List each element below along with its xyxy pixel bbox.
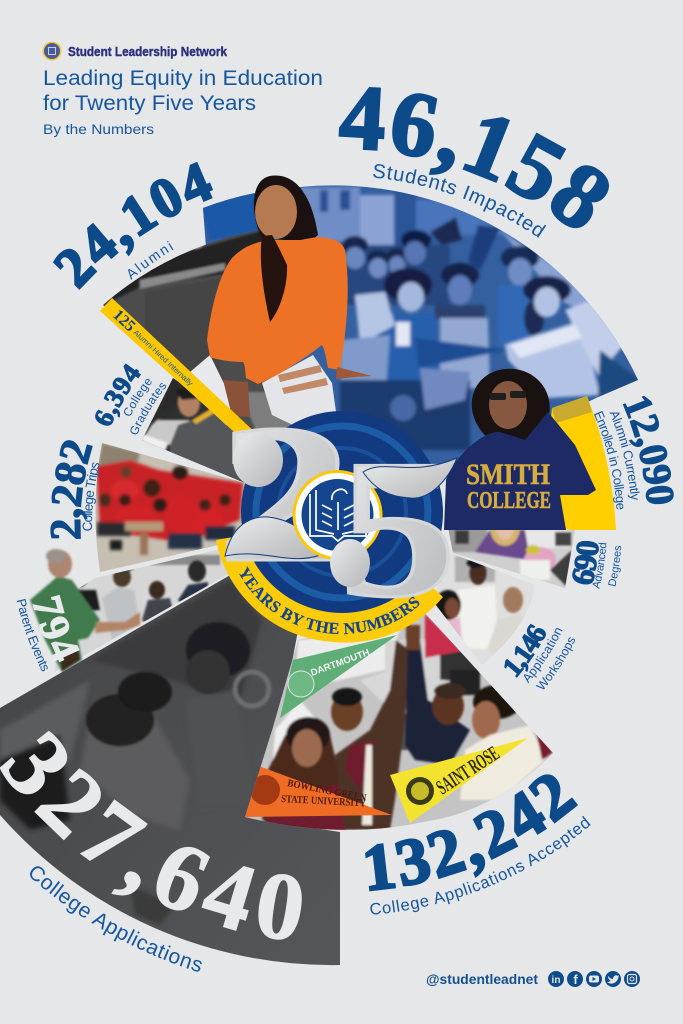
band: 125 alumni hired internally: [100, 298, 260, 440]
center book seal: [292, 470, 382, 560]
stat: 1,146 application workshops: Workshops: [536, 637, 575, 690]
header: [42, 42, 323, 137]
stat: 1,146 application workshops: [504, 624, 575, 690]
numeral 2: 2: [217, 384, 353, 603]
blue seal: [241, 411, 443, 613]
panel: application workshops photo: [436, 554, 535, 664]
icon: facebook: [567, 971, 583, 987]
footer: social handle and icons: @studentleadnet: [426, 971, 538, 987]
panel: college graduates photo: [142, 378, 245, 483]
panel: alumni field photo: [103, 230, 288, 429]
badge: 25 years by the numbers: [216, 384, 458, 643]
stat: 132,242 college applications accepted: College Applications Accepted: [370, 816, 591, 914]
panel: alumni enrolled in college yellow band: [540, 396, 616, 530]
crowd: [340, 245, 450, 305]
photo: woman in Smith College hoodie: COLLEGE: [467, 488, 551, 514]
stat: 6,394 college graduates: 6,394: [95, 363, 141, 426]
stat: 24,104 alumni: Alumni: [128, 240, 174, 280]
pennant: Dartmouth: [280, 635, 397, 718]
numeral 5: 5: [338, 419, 457, 638]
stat: 6,394 college graduates: Graduates: [130, 383, 166, 434]
logo: Student Leadership Network: [42, 42, 228, 60]
stat: 690 advanced degrees: Advanced: [592, 542, 606, 589]
photo: woman in Smith College hoodie: [444, 369, 596, 530]
stat: 46,158 students impacted: 46,158: [338, 87, 609, 228]
stat: 6,394 college graduates: College: [124, 378, 152, 416]
pennant: Dartmouth: DARTMOUTH: [309, 647, 371, 679]
pennant: Saint Rose: SAINT ROSE: [432, 741, 503, 799]
stat: 794 parent events: 794: [32, 594, 80, 662]
stat: 12,090 alumni currently enrolled: [594, 396, 674, 510]
stat: 1,146 application workshops: Application: [524, 628, 562, 684]
stat: 2,282 college trips: 2,282: [50, 440, 93, 539]
ribbon text: YEARS BY THE NUMBERS: [239, 566, 420, 634]
icon: twitter: [605, 971, 621, 987]
pennant: Bowling Green: BOWLING GREEN: [286, 778, 367, 804]
stat: 12,090 alumni currently enrolled: Enrolled in College: [594, 410, 624, 510]
icon: linkedin: [548, 971, 564, 987]
band: 125 alumni hired internally: 125: [109, 306, 138, 335]
red college flag: [425, 614, 462, 658]
pennant: Bowling Green: STATE UNIVERSITY: [281, 794, 367, 809]
logo: Student Leadership Network: Student Leadership Network: [68, 44, 228, 59]
stat: 327,640 college applications: College Applications: [30, 866, 202, 972]
stat: 690 advanced degrees: Degrees: [608, 546, 622, 586]
panel: parent events photo: [28, 548, 228, 673]
title: for Twenty Five Years: [43, 91, 256, 115]
ribbon: [216, 535, 443, 643]
title: [43, 66, 323, 115]
photo: woman in orange sweatshirt: [190, 176, 372, 436]
subtitle: By the Numbers: [43, 122, 154, 137]
stat: 690 advanced degrees: [572, 540, 622, 589]
stat: 690 advanced degrees: 690: [572, 540, 599, 584]
icon: instagram: [624, 971, 640, 987]
icon: facebook: f: [573, 972, 578, 987]
panel: college applications accepted photo: [245, 614, 553, 830]
pennant: Saint Rose: [390, 738, 528, 823]
panel: advanced degrees photo: [448, 529, 575, 588]
stat: 794 parent events: Parent Events: [16, 598, 48, 672]
photo: woman in Smith College hoodie: SMITH: [466, 458, 550, 491]
footer: social handle and icons: [426, 971, 640, 987]
icon: linkedin: in: [552, 975, 560, 986]
panel: college trips photo: [96, 443, 245, 572]
stat: 12,090 alumni currently enrolled: Alumni Currently: [610, 412, 640, 500]
icon: youtube: [586, 971, 602, 987]
band: 125 alumni hired internally: Alumni Hired Internally: [132, 328, 195, 388]
stat: 6,394 college graduates: [95, 363, 166, 434]
pennant: Bowling Green: [245, 765, 392, 817]
icon: open book: [310, 489, 366, 541]
panel: students impacted photo wedge: [203, 185, 638, 464]
stat: 12,090 alumni currently enrolled: 12,090: [622, 396, 674, 504]
stat: 46,158 students impacted: Students Impacted: [373, 164, 546, 238]
stat: 1,146 application workshops: 1,146: [504, 624, 546, 678]
title: Leading Equity in Education: [43, 66, 323, 90]
stat: 24,104 alumni: 24,104: [52, 162, 214, 290]
stat: 132,242 college applications accepted: 132,242: [365, 774, 578, 892]
stat: 2,282 college trips: College Trips: [82, 462, 100, 531]
panel: college applications photo: [0, 560, 345, 970]
